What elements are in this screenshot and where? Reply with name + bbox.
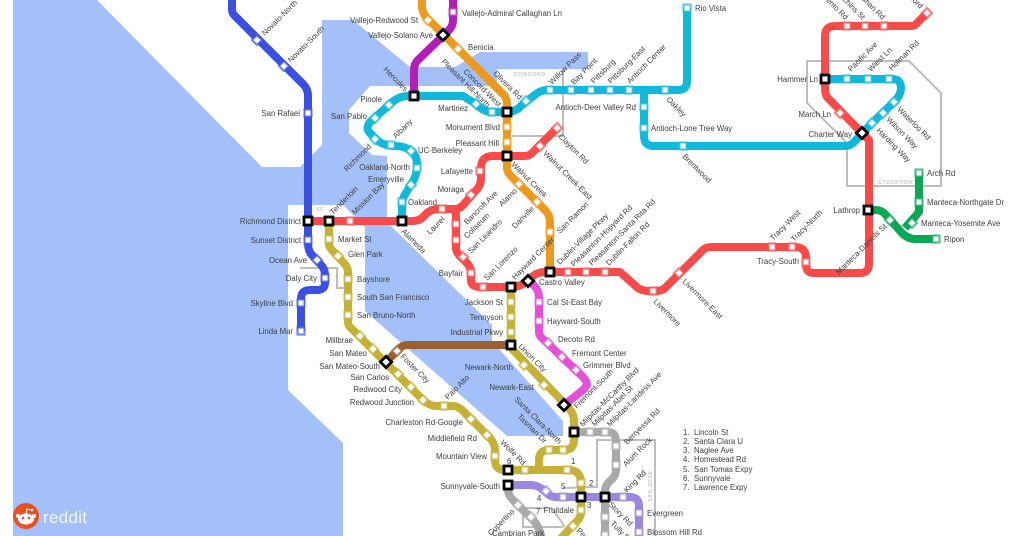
station labels: horizontal, right aligned: Middlefield Rd <box>428 434 477 443</box>
station labels: rotated up: Hayward Center <box>510 235 557 281</box>
station labels: rotated up: King Rd <box>622 468 648 494</box>
station labels: rotated down: Brentwood <box>681 152 713 185</box>
station labels: rotated down: Union City <box>517 342 548 374</box>
station labels: rotated up: Holman Rd <box>887 38 921 72</box>
station labels: horizontal, right aligned: Millbrae <box>326 336 353 345</box>
station labels: horizontal, right aligned: Tennyson <box>470 313 503 322</box>
legend: numbered station key: 3. <box>683 446 690 455</box>
station labels: rotated down: Livermore-East <box>681 277 725 321</box>
station labels: rotated up: Bancroft Ave <box>462 189 500 226</box>
station labels: horizontal, right aligned: Bayfair <box>439 269 463 278</box>
station labels: horizontal, left aligned: Manteca-Yosemite Ave <box>921 219 1000 228</box>
map reference numbers: 6 <box>507 457 511 466</box>
station labels: rotated up: Laurel <box>425 215 447 236</box>
legend: numbered station key: 7. <box>683 483 690 492</box>
station labels: rotated up: Wiest Ln <box>866 46 894 73</box>
line: lavender <box>508 485 642 536</box>
station labels: rotated up: Berryessa Rd <box>622 407 662 446</box>
station labels: horizontal, left aligned: Vallejo-Admiral Callaghan Ln <box>462 9 562 18</box>
station labels: rotated down: Livermore <box>652 297 682 328</box>
station labels: rotated up: Manteca-Daniels St <box>834 221 889 276</box>
map reference numbers: 1 <box>571 457 575 466</box>
station labels: rotated up: Bay Point <box>569 56 600 86</box>
station labels: horizontal, right aligned: Moraga <box>438 185 465 194</box>
station labels: rotated up: Antioch Center <box>625 42 668 85</box>
station labels: horizontal, right aligned: Charter Way <box>809 130 852 139</box>
station labels: horizontal, right aligned: San Mateo-South <box>319 362 380 371</box>
station labels: horizontal, right aligned: Mountain View <box>436 452 487 461</box>
station labels: rotated down: Story Rd <box>607 500 634 528</box>
legend: numbered station key: San Tomas Expy <box>694 465 752 474</box>
station labels: rotated up: Richmond <box>342 142 373 173</box>
station labels: horizontal, right aligned: Ocean Ave <box>269 256 307 265</box>
station labels: horizontal, left aligned: Fremont Center <box>572 349 627 358</box>
legend: numbered station key: Lawrence Expy <box>694 483 747 492</box>
city outline: San Francisco <box>300 207 347 288</box>
station labels: rotated down: Olivera Rd <box>492 69 524 101</box>
line: gold peninsula <box>326 221 584 536</box>
station labels: rotated down: Clayton Rd <box>557 132 590 166</box>
station labels: rotated up: Fremont-South <box>572 367 615 410</box>
station labels: horizontal, right aligned: Sunnyvale-South <box>441 482 500 491</box>
station labels: rotated up: San Leandro <box>466 217 504 255</box>
station labels: horizontal, right aligned: Lafayette <box>441 167 473 176</box>
station labels: horizontal, left aligned: Manteca-Northgate Dr <box>927 198 1005 207</box>
line: brown <box>386 345 511 362</box>
station labels: horizontal, right aligned: San Rafael <box>261 109 300 118</box>
station labels: rotated down: Concord-West <box>462 67 504 109</box>
line: cyan <box>368 4 901 221</box>
station labels: rotated up: Pacific Ave <box>846 40 879 73</box>
legend: numbered station key: 5. <box>683 465 690 474</box>
station labels: rotated up: Dublin-Village Pkwy <box>555 211 610 266</box>
station labels: rotated down: Wolfe Rd <box>499 438 528 467</box>
station labels: horizontal, left aligned: UC-Berkeley <box>418 146 462 155</box>
legend: numbered station key: 6. <box>683 474 690 483</box>
city outline: San Jose <box>523 440 655 536</box>
station labels: rotated down: Pleasant Hill-North <box>440 57 492 109</box>
station labels: rotated up: Mission Bay <box>350 180 386 216</box>
station labels: rotated up: Dublin-Fallon Rd <box>604 220 651 267</box>
station labels: horizontal, left aligned: Castro Valley <box>539 278 585 287</box>
station labels: horizontal, right aligned: Antioch-Deer Valley Rd <box>556 103 636 112</box>
station labels: horizontal, left aligned: Ripon <box>944 235 964 244</box>
station labels: horizontal, right aligned: Redwood City <box>353 385 402 394</box>
city outline: Stockton: STOCKTON <box>878 180 912 186</box>
station labels: horizontal, right aligned: Tracy-South <box>757 257 799 266</box>
legend: numbered station key: Naglee Ave <box>694 446 734 455</box>
city outline: Concord: CONCORD <box>514 72 546 78</box>
station labels: horizontal, right aligned: Lathrop <box>834 206 861 215</box>
station labels: rotated down: Wilson Way <box>885 115 920 150</box>
station labels: horizontal, right aligned: Redwood Junction <box>350 398 414 407</box>
station labels: rotated up: Pleasanton-Santa Rita Rd <box>587 197 657 267</box>
line: purple <box>414 0 456 96</box>
station labels: horizontal, right aligned: Monument Blvd <box>446 123 500 132</box>
city outline: San Jose: SAN JOSE <box>648 470 654 502</box>
map reference numbers: 3 <box>587 501 591 510</box>
station labels: rotated up: Danville <box>510 204 536 230</box>
station labels: horizontal, left aligned: San Bruno-North <box>357 311 416 320</box>
station labels: horizontal, right aligned: San Carlos <box>350 373 389 382</box>
station labels: horizontal, right aligned: Emeryville <box>368 175 404 184</box>
station labels: rotated down: Santa Clara-North <box>513 395 563 446</box>
map reference numbers <box>507 457 593 516</box>
station labels: horizontal, left aligned: Rio Vista <box>695 4 727 13</box>
station labels: horizontal, left aligned: Arch Rd <box>927 169 955 178</box>
station labels: horizontal, left aligned: Market St <box>338 235 372 244</box>
station labels: horizontal, right aligned: Pinole <box>360 95 382 104</box>
station labels: horizontal, right aligned: Charleston Rd-Google <box>385 418 463 427</box>
map reference numbers: 7 <box>536 507 540 516</box>
station labels: rotated up: San Lorenzo <box>482 244 520 282</box>
logo: reddit: reddit <box>43 508 87 527</box>
station labels: horizontal, left aligned: Antioch-Lone Tree Way <box>651 124 732 133</box>
city outline: San Francisco: SF <box>316 207 324 213</box>
station labels: horizontal, left aligned: Hayward-South <box>547 317 601 326</box>
legend: numbered station key: Sunnyvale <box>694 474 730 483</box>
water: San Francisco Bay and Pacific <box>13 0 588 536</box>
station labels: rotated up: Novato-South <box>286 24 326 64</box>
city outline: Concord <box>512 69 563 136</box>
station labels: rotated down: Foster City <box>399 352 432 385</box>
station labels: rotated down <box>382 0 932 536</box>
station labels: rotated up: Albany <box>391 117 414 140</box>
station labels: rotated up: Alum Rock <box>621 435 654 468</box>
legend: numbered station key <box>683 428 752 492</box>
station labels: horizontal, left aligned: Grimmer Blvd <box>583 361 631 370</box>
station labels: horizontal, right aligned: Martinez <box>438 104 468 113</box>
station labels: horizontal, right aligned: Skyline Blvd <box>251 299 293 308</box>
station labels: rotated down: Harding Way <box>875 126 913 164</box>
station labels: horizontal, left aligned: Decoto Rd <box>558 335 595 344</box>
station labels: horizontal, left aligned: Benicia <box>468 43 494 52</box>
station labels: horizontal, right aligned: Daly City <box>286 274 317 283</box>
station labels: horizontal, left aligned: Oakland <box>408 198 437 207</box>
line: green <box>868 170 940 242</box>
station labels: rotated down: Waterloo Rd <box>896 105 932 142</box>
legend: numbered station key: Lincoln St <box>694 428 729 437</box>
station labels: rotated up: Tracy-North <box>789 208 824 243</box>
station labels: rotated up: Milpitas-Abel St <box>590 383 635 428</box>
station labels: rotated down: Oakley <box>665 95 688 119</box>
map reference numbers: 5 <box>561 482 566 491</box>
station labels: rotated down: Walnut Creek <box>510 160 549 200</box>
legend: numbered station key: 2. <box>683 437 690 446</box>
station labels: rotated up: Coliseum <box>462 211 491 240</box>
station labels: rotated up: Pittsburg <box>589 57 617 85</box>
line: blue <box>232 0 328 334</box>
station labels: horizontal, left aligned: Bayshore <box>357 275 390 284</box>
station labels: horizontal, right aligned <box>240 16 861 536</box>
station labels: horizontal, left aligned <box>338 4 1005 536</box>
station labels: horizontal, right aligned: Fruitdale <box>544 506 574 515</box>
legend: numbered station key: 1. <box>683 428 690 437</box>
map reference numbers: 4 <box>537 494 542 503</box>
station labels: horizontal, right aligned: San Mateo <box>329 349 368 358</box>
line: grey south bay <box>508 428 620 536</box>
station labels: horizontal, right aligned: Sunset District <box>251 236 302 245</box>
station labels: horizontal, left aligned: Glen Park <box>348 250 383 259</box>
station labels: horizontal, right aligned: Newark-North <box>465 363 513 372</box>
line: magenta <box>528 281 587 405</box>
station labels: horizontal, left aligned: Evergreen <box>647 509 683 518</box>
station labels: rotated down: Alameda <box>400 227 428 256</box>
station labels: horizontal, right aligned: March Ln <box>798 110 831 119</box>
line: red <box>308 8 932 294</box>
station labels: horizontal, right aligned: San Pablo <box>331 112 368 121</box>
station labels: rotated up: San Ramon <box>555 200 591 235</box>
station labels: rotated up: Tracy-West <box>768 208 803 242</box>
station labels: rotated up: Milpitas-Landess Ave <box>605 370 663 428</box>
station labels: horizontal, right aligned: Linda Mar <box>258 327 293 336</box>
map reference numbers: 2 <box>589 479 593 488</box>
legend: numbered station key: Homestead Rd <box>694 455 746 464</box>
station labels: horizontal, right aligned: Jackson St <box>465 298 504 307</box>
station labels: rotated up: Pleasanton-Hopyard Rd <box>569 203 634 268</box>
interchange stations <box>304 29 872 501</box>
line: orange <box>422 0 554 272</box>
station labels: rotated up: Milpitas-McCarthy Blvd <box>578 366 641 428</box>
station labels: rotated up: Palo Alto <box>443 373 472 401</box>
station labels: horizontal, right aligned: Oakland-North <box>359 163 410 172</box>
station labels: horizontal, right aligned: Vallejo-Redwood St <box>350 16 419 25</box>
city outline: Stockton <box>807 61 941 186</box>
station labels: rotated down: Hercules <box>382 65 410 93</box>
station labels: rotated up: Pittsburg-East <box>606 44 648 85</box>
station labels: horizontal, right aligned: Pleasant Hill <box>456 139 499 148</box>
legend: numbered station key: 4. <box>683 455 690 464</box>
station labels: horizontal, right aligned: Newark-East <box>489 383 535 392</box>
station labels: rotated up: Tenderloin <box>328 185 360 216</box>
station labels: horizontal, right aligned: Richmond District <box>240 217 302 226</box>
station labels: horizontal, left aligned: South San Francisco <box>357 293 430 302</box>
station labels: horizontal, right aligned: Vallejo-Solano Ave <box>368 31 433 40</box>
station labels: rotated up: Alamo <box>497 186 520 208</box>
station labels: rotated down: Walnut Creek-East <box>542 149 595 202</box>
station labels: horizontal, left aligned: Cal St-East Bay <box>547 298 602 307</box>
station labels: rotated up <box>260 0 921 536</box>
station labels: rotated down: Tasman Dr <box>516 412 549 445</box>
station labels: horizontal, right aligned: Hammer Ln <box>777 75 818 84</box>
logo: reddit <box>13 503 87 529</box>
station labels: horizontal, right aligned: Industrial Pkwy <box>451 328 503 337</box>
station labels: rotated up: Willow Pass <box>547 50 583 86</box>
legend: numbered station key: Santa Clara U <box>694 437 743 446</box>
